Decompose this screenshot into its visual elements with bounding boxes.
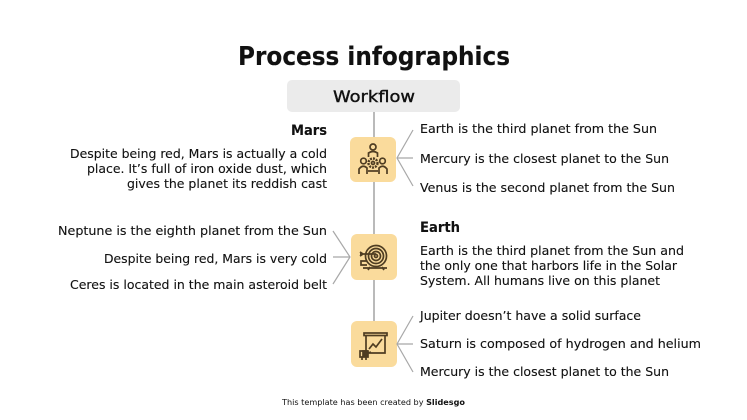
arrow: chart branches	[397, 316, 413, 372]
credit line: This template has been created by Slidesgo	[281, 398, 466, 407]
panel: earth list: Neptune is the eighth planet from the Sun	[58, 223, 327, 238]
panel: earth list: Despite being red, Mars is very cold	[104, 251, 327, 266]
panel: earth text: the only one that harbors life in the Solar	[420, 258, 678, 273]
workflow connector line	[373, 111, 375, 322]
panel: earth text	[420, 220, 684, 288]
workflow header box: Workflow	[333, 87, 415, 106]
panel: mars list	[420, 121, 675, 195]
workflow header box	[287, 80, 460, 112]
panel: mars text: Despite being red, Mars is actually a cold	[70, 146, 327, 161]
panel: mars text	[70, 123, 327, 191]
panel: earth text: System. All humans live on this planet	[420, 273, 660, 288]
panel: mars list: Venus is the second planet from the Sun	[420, 180, 675, 195]
icon: team gear	[350, 137, 396, 182]
panel: mars list: Earth is the third planet from the Sun	[420, 121, 657, 136]
arrow: earth branches	[333, 231, 350, 284]
panel: earth list	[58, 223, 327, 292]
panel: mars text: Mars	[291, 123, 327, 139]
panel: chart list: Saturn is composed of hydrogen and helium	[420, 336, 701, 351]
title: Process infographics	[238, 42, 510, 72]
panel: mars list: Mercury is the closest planet to the Sun	[420, 151, 669, 166]
panel: chart list: Jupiter doesn’t have a solid surface	[419, 308, 641, 323]
panel: earth text: Earth is the third planet from the Sun and	[420, 243, 684, 258]
panel: mars text: gives the planet its reddish cast	[127, 176, 327, 191]
panel: mars text: place. It’s full of iron oxide dust, which	[87, 161, 327, 176]
panel: earth text: Earth	[420, 220, 460, 236]
arrow: mars branches	[397, 130, 413, 186]
icon: target	[351, 234, 397, 280]
icon: presentation chart	[351, 321, 397, 367]
panel: earth list: Ceres is located in the main asteroid belt	[70, 277, 327, 292]
panel: chart list: Mercury is the closest planet to the Sun	[420, 364, 669, 379]
panel: chart list	[419, 308, 701, 379]
